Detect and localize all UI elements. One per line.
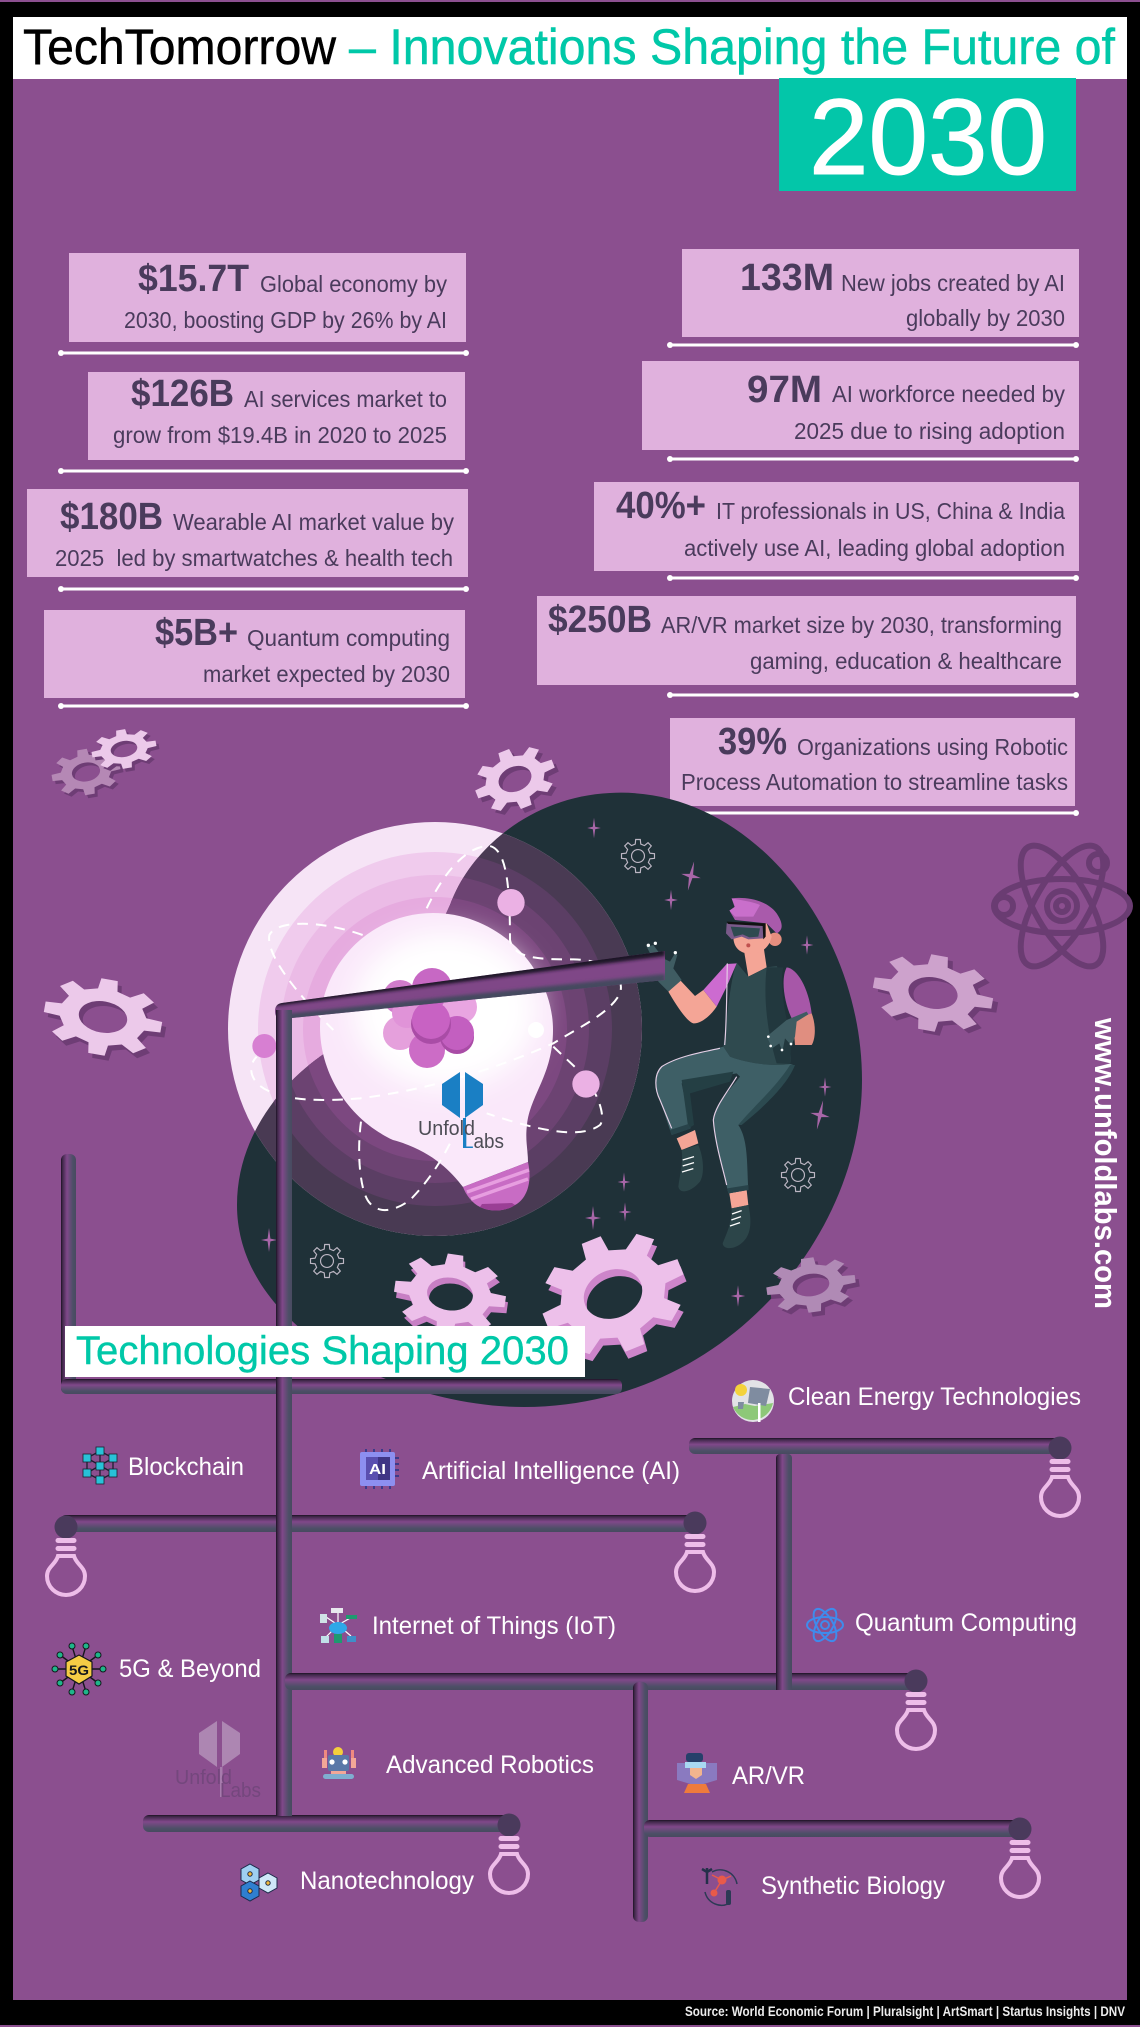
icon: AI chip xyxy=(360,1449,399,1489)
stat: $15.7T: Global economy by xyxy=(260,271,447,297)
stat: 133M xyxy=(667,249,1079,348)
stat: 133M: New jobs created by AI xyxy=(841,270,1065,296)
gears: top left pair xyxy=(48,724,162,803)
stat: $250B: gaming, education & healthcare xyxy=(750,648,1062,674)
stat: 97M: 97M xyxy=(747,369,822,411)
stat: $250B: $250B xyxy=(548,599,652,641)
label: Clean Energy Technologies: Clean Energy Technologies xyxy=(788,1383,1081,1411)
logo: Unfold Labs: Unfold xyxy=(418,1118,475,1140)
label: Nanotechnology: Nanotechnology xyxy=(300,1867,474,1895)
illustration: dashed orbits and particles xyxy=(251,846,621,1210)
icon: nanotechnology xyxy=(241,1864,277,1901)
stat: $5B+: $5B+ xyxy=(155,612,238,654)
label: Quantum Computing: Quantum Computing xyxy=(855,1609,1077,1637)
gear: left xyxy=(38,969,172,1070)
website vertical: www.unfoldlabs.com xyxy=(1088,1017,1123,1309)
label: Advanced Robotics: Advanced Robotics xyxy=(386,1751,594,1779)
icon: AR/VR xyxy=(677,1753,717,1793)
stat: $126B xyxy=(58,372,469,474)
pendant bulbs xyxy=(47,1436,1079,1897)
stat: $15.7T: $15.7T xyxy=(138,258,249,300)
label: 5G & Beyond: 5G & Beyond xyxy=(119,1655,261,1683)
gear: right xyxy=(867,945,1004,1045)
icon: synthetic biology xyxy=(702,1868,737,1905)
stat: $15.7T: 2030, boosting GDP by 26% by AI xyxy=(124,307,447,333)
icon: clean energy xyxy=(732,1380,774,1422)
stat: $126B: grow from $19.4B in 2020 to 2025 xyxy=(113,422,447,448)
stat: $126B: $126B xyxy=(131,373,234,415)
gear: 3D large bottom xyxy=(524,1213,705,1382)
stat: $180B: Wearable AI market value by xyxy=(173,509,454,535)
title: TechTomorrow xyxy=(23,19,337,75)
stat: $5B+ xyxy=(44,610,469,709)
stat: 97M: AI workforce needed by xyxy=(832,381,1065,407)
pipe: tilted tube to the hand xyxy=(275,951,665,1018)
pipe network xyxy=(60,1010,1061,1922)
gear: 3D small bottom xyxy=(389,1247,513,1347)
stat: 39%: 39% xyxy=(718,721,787,763)
icon: blockchain xyxy=(83,1447,117,1484)
icon: IoT xyxy=(320,1608,357,1643)
label: AR/VR: AR/VR xyxy=(732,1762,805,1790)
title: – Innovations Shaping the Future of xyxy=(349,19,1115,75)
illustration: VR person xyxy=(647,898,815,1248)
illustration: nucleus cluster xyxy=(383,968,477,1068)
logo: Unfold Labs xyxy=(418,1072,504,1153)
gear: right lower pale xyxy=(763,1252,863,1322)
icon: 5G xyxy=(52,1643,106,1695)
outline gears on dark backdrop xyxy=(311,840,814,1277)
gear: top centre xyxy=(466,736,568,826)
stat: $250B xyxy=(537,596,1079,698)
label: Synthetic Biology: Synthetic Biology xyxy=(761,1872,945,1900)
title xyxy=(13,17,1127,79)
icon: 5G: 5G xyxy=(69,1662,89,1678)
stat: $180B: 2025 led by smartwatches & health tech xyxy=(55,545,453,571)
stat: 40%+ xyxy=(594,482,1079,581)
stat: 97M: 2025 due to rising adoption xyxy=(794,418,1065,444)
stat: 40%+: 40%+ xyxy=(616,485,706,527)
year badge: 2030: 2030 xyxy=(809,76,1047,197)
watermark: Unfold Labs xyxy=(175,1721,261,1802)
sparkle stars xyxy=(261,818,833,1307)
stat: $250B: AR/VR market size by 2030, transforming xyxy=(661,612,1062,638)
watermark: Unfold Labs: Unfold xyxy=(175,1767,232,1789)
stat: 39%: Organizations using Robotic xyxy=(797,734,1068,760)
icon: quantum xyxy=(807,1605,843,1645)
stat: $5B+: Quantum computing xyxy=(247,625,450,651)
heading: Technologies Shaping 2030: Technologies Shaping 2030 xyxy=(76,1329,569,1373)
stat: 40%+: actively use AI, leading global adoption xyxy=(684,535,1065,561)
watermark: Unfold Labs: Labs xyxy=(220,1780,261,1802)
stat: $180B: $180B xyxy=(60,496,163,538)
icon: atom outline xyxy=(994,834,1130,978)
stat: 133M: 133M xyxy=(740,257,834,299)
stat: 97M xyxy=(642,361,1079,462)
illustration: concentric light rings xyxy=(228,822,642,1236)
stat: $180B xyxy=(27,489,469,592)
label: Internet of Things (IoT): Internet of Things (IoT) xyxy=(372,1612,616,1640)
icon: robot xyxy=(322,1747,356,1779)
label: Artificial Intelligence (AI): Artificial Intelligence (AI) xyxy=(422,1457,680,1485)
stat: 39% xyxy=(667,718,1079,816)
illustration: light bulb xyxy=(320,913,553,1211)
stat: 133M: globally by 2030 xyxy=(906,305,1065,331)
stat: $126B: AI services market to xyxy=(244,386,447,412)
label: Blockchain: Blockchain xyxy=(128,1453,244,1481)
stat: $5B+: market expected by 2030 xyxy=(203,661,450,687)
stat: 40%+: IT professionals in US, China & India xyxy=(716,498,1065,524)
icon: AI chip: AI xyxy=(369,1461,386,1478)
stat: $15.7T xyxy=(58,253,469,356)
illustration: dark blob backdrop xyxy=(237,793,862,1407)
stat: 39%: Process Automation to streamline tasks xyxy=(681,769,1068,795)
logo: Unfold Labs: Labs xyxy=(463,1131,504,1153)
